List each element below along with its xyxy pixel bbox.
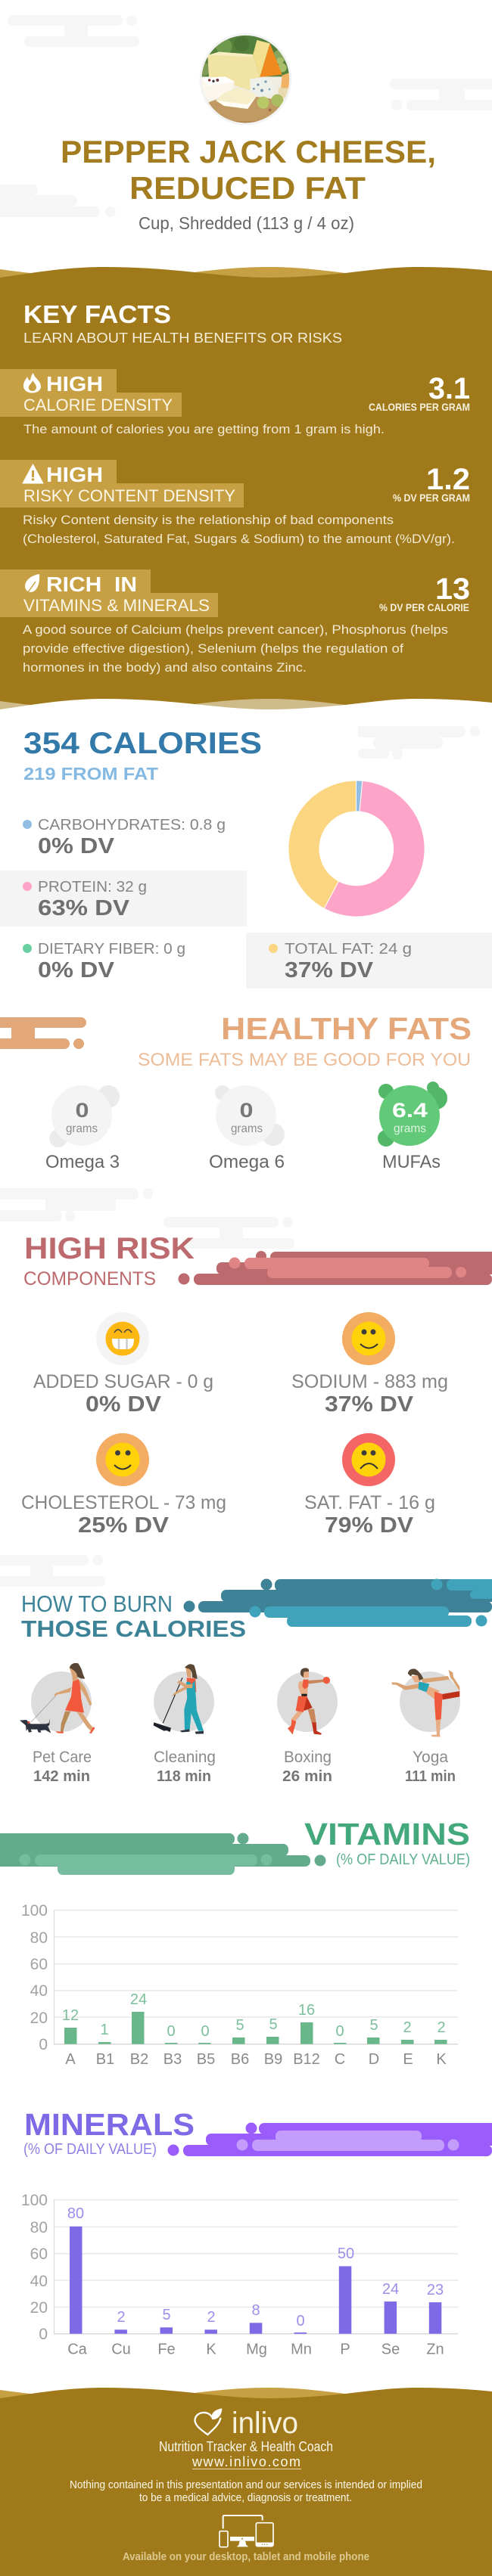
risk item: sodium [291,1312,448,1417]
bar chart: vitamins: 5 [269,2016,278,2033]
heading: minerals: (% OF DAILY VALUE) [23,2141,157,2158]
bar chart: vitamins: 60 [30,1956,48,1973]
bar chart: minerals: Ca [67,2342,88,2358]
heading: calories: 354 CALORIES [23,727,262,760]
heading: calories [23,727,262,784]
card: omega 6: grams [231,1122,263,1135]
icon: smiling face [351,1322,386,1355]
icon: woman in dancer pose [391,1668,459,1736]
bar chart: minerals: Mn [291,2342,312,2358]
bar chart: minerals: K [206,2342,216,2358]
legend: total fat [246,933,492,989]
heading: high risk: COMPONENTS [23,1268,156,1290]
bar chart: vitamins: B5 [197,2051,215,2068]
card: omega 3: grams [66,1122,98,1135]
bar chart: minerals: 40 [30,2273,48,2290]
bar chart: vitamins: 5 [235,2017,244,2034]
bar chart: minerals: 2 [207,2309,216,2326]
bar chart: minerals: 50 [338,2245,354,2262]
panel: risky content density: % DV PER GRAM [393,492,470,504]
bar chart: minerals: 24 [382,2281,399,2298]
panel: rich in vitamins and minerals: 13 [435,573,470,606]
bar chart: minerals: Zn [426,2342,444,2358]
card: mufas: MUFAs [382,1152,441,1172]
bar chart: vitamins: B2 [130,2051,148,2068]
title: PEPPER JACK CHEESE, [61,134,436,169]
bar chart: vitamins: 2 [437,2019,446,2036]
activity: boxing: 26 min [282,1768,332,1785]
panel: calorie density [0,369,470,436]
panel: calorie density: 3.1 [428,372,470,405]
logo: inlivo [195,2407,298,2440]
activity: pet care: Pet Care [33,1749,92,1766]
bar chart: vitamins: 20 [30,2010,48,2027]
logo: inlivo: inlivo [232,2407,298,2440]
heading: key facts [23,300,342,346]
bar chart: minerals: 0 [296,2313,305,2329]
risk item: saturated fat: 79% DV [325,1513,414,1538]
legend: total fat: TOTAL FAT: 24 g [285,941,412,957]
disclaimer: Nothing contained in this presentation and our services is intended or implied [70,2478,422,2491]
risk item: saturated fat: SAT. FAT - 16 g [304,1492,435,1513]
heading: how to burn those calories [21,1591,246,1642]
bar chart: vitamins: E [403,2051,413,2068]
icon: woman walking dog [20,1663,95,1733]
heading: high risk: HIGH RISK [24,1232,195,1265]
bar chart: vitamins: 0 [39,2036,48,2053]
activity: yoga [391,1668,460,1785]
bar chart: vitamins: B6 [231,2051,249,2068]
activity: boxing: Boxing [284,1749,332,1766]
activity: boxing [277,1668,338,1785]
bar chart: minerals: P [340,2342,350,2358]
bar chart: minerals: 23 [427,2282,444,2298]
tagline: Nutrition Tracker & Health Coach [159,2439,333,2454]
panel: calorie density: CALORIE DENSITY [23,396,173,414]
heading: minerals: MINERALS [24,2107,195,2142]
risk item: cholesterol: CHOLESTEROL - 73 mg [21,1492,226,1513]
icon: leaf [25,574,39,592]
icon: grinning face [106,1322,139,1355]
bar chart: vitamins: K [436,2051,447,2068]
availability note: Available on your desktop, tablet and mobile phone [123,2550,369,2563]
activity: yoga: Yoga [413,1749,448,1766]
title: REDUCED FAT [129,170,366,206]
icon: woman sweeping [154,1664,204,1734]
legend: protein: PROTEIN: 32 g [38,879,147,895]
bar chart: minerals: 20 [30,2299,48,2317]
panel: footer background with waves [0,2388,492,2576]
panel: calorie density: HIGH [46,372,103,396]
bar chart: vitamins: B9 [264,2051,282,2068]
bar chart: vitamins: 1 [100,2022,109,2038]
panel: rich in vitamins and minerals: hormones in the body) and also contains Zinc. [23,660,307,675]
bar chart: vitamins: 24 [130,1991,147,2008]
panel: key facts background with waves [0,267,492,722]
icon: flame [23,373,41,393]
bar chart: vitamins: 100 [21,1902,48,1920]
bar chart: vitamins: 0 [335,2023,344,2040]
bar chart: minerals: 2 [117,2309,126,2326]
bar chart: minerals: 100 [21,2192,48,2209]
bar chart: minerals: 8 [251,2302,260,2319]
bar chart: vitamins: B3 [163,2051,182,2068]
icon: heart with leaf [195,2408,222,2435]
decorative blob: burn calories [183,1579,492,1627]
heading: healthy fats: HEALTHY FATS [221,1011,472,1046]
heading: how to burn those calories: THOSE CALORIES [21,1615,246,1642]
legend: dietary fiber: 0% DV [38,958,115,982]
bar chart: vitamins: 0 [201,2023,210,2040]
bar chart: vitamins: 2 [403,2019,412,2036]
bar chart: minerals: Mg [246,2342,267,2358]
risk item: added sugar: 0% DV [86,1392,162,1417]
risk item: sodium: SODIUM - 883 mg [291,1371,448,1392]
bar chart: vitamins: D [369,2051,379,2068]
decorative blob: vitamins [0,1833,325,1875]
decorative blob: healthy fats [0,1017,86,1049]
bar chart: vitamins: B12 [293,2051,320,2068]
icon: devices [220,2515,273,2547]
heading: calories: 219 FROM FAT [23,764,158,784]
bar chart: vitamins: 16 [298,2002,315,2019]
bar chart: vitamins: 0 [167,2023,176,2040]
risk item: cholesterol: 25% DV [78,1513,170,1538]
risk item: saturated fat [304,1433,435,1538]
panel: calorie density: The amount of calories you are getting from 1 gram is high. [23,422,385,436]
bar chart: minerals: 5 [162,2307,171,2323]
activity: cleaning [154,1664,216,1785]
bar chart: minerals: 80 [67,2205,84,2222]
website link: www.inlivo.com [192,2454,300,2469]
bar chart: vitamins: C [335,2051,345,2068]
bar chart: vitamins [21,1902,458,2068]
panel: risky content density [0,460,470,546]
panel: risky content density: RISKY CONTENT DENSITY [23,486,235,505]
card: omega 3: Omega 3 [45,1152,120,1172]
bar chart: vitamins: 40 [30,1982,48,2000]
risk item: sodium: 37% DV [325,1392,414,1417]
bar chart: minerals: 0 [39,2326,48,2343]
icon: smiling face [106,1443,139,1476]
bar chart: vitamins: 5 [369,2017,378,2034]
legend: protein: 63% DV [38,896,130,920]
disclaimer [70,2478,422,2504]
risk item: cholesterol [21,1433,226,1538]
bar chart: minerals: Se [381,2342,400,2358]
activity: cleaning: 118 min [157,1768,211,1785]
bar chart: vitamins: B1 [96,2051,114,2068]
heading: healthy fats: SOME FATS MAY BE GOOD FOR YOU [138,1050,471,1070]
bar chart: minerals: Cu [111,2342,131,2358]
panel: risky content density: (Cholesterol, Saturated Fat, Sugars & Sodium) to the amount (%DV/gr). [23,532,455,546]
decorative blob: minerals [168,2122,492,2156]
decorative clouds: header [0,15,492,217]
legend: protein [0,871,247,926]
card: omega 6: Omega 6 [209,1152,285,1172]
panel: risky content density: Risky Content density is the relationship of bad components [23,513,394,527]
heading: high risk [23,1232,195,1290]
title [61,134,436,206]
bar chart: minerals: 80 [30,2219,48,2236]
serving size: Cup, Shredded (113 g / 4 oz) [139,213,354,233]
legend: carbohydrates: 0% DV [38,834,115,858]
risk item: added sugar [33,1312,213,1417]
heading: vitamins: (% OF DAILY VALUE) [336,1851,470,1868]
card: omega 3 [45,1085,120,1172]
card: mufas: 6.4 [392,1099,428,1122]
panel: rich in vitamins and minerals: RICH IN [46,573,137,596]
heading: minerals [23,2107,195,2158]
card: omega 3: 0 [76,1099,89,1122]
disclaimer: to be a medical advice, diagnosis or treatment. [139,2491,352,2504]
panel: rich in vitamins and minerals: VITAMINS & MINERALS [23,596,210,615]
panel: rich in vitamins and minerals: % DV PER CALORIE [379,601,469,613]
panel: risky content density: HIGH [46,463,103,486]
legend: carbohydrates [23,817,226,858]
panel: rich in vitamins and minerals: A good source of Calcium (helps prevent cancer), Phosphorus (helps [23,622,448,637]
heading: how to burn those calories: HOW TO BURN [21,1591,173,1617]
card: omega 6: 0 [239,1099,253,1122]
panel: rich in vitamins and minerals: provide effective digestion), Selenium (helps the regulation of [23,641,403,656]
decorative cloud: burn calories [0,1555,105,1587]
icon: boxer [288,1668,330,1735]
card: omega 6 [209,1085,285,1172]
decorative blob: high risk [179,1251,492,1285]
bar chart: vitamins: 80 [30,1929,48,1947]
activity: yoga: 111 min [405,1768,456,1785]
heading: healthy fats [138,1011,472,1070]
panel: calorie density: CALORIES PER GRAM [369,401,470,413]
bar chart: minerals: 60 [30,2245,48,2263]
donut chart: macronutrients [288,781,425,917]
bar chart: minerals: Fe [157,2342,176,2358]
legend: carbohydrates: CARBOHYDRATES: 0.8 g [38,817,226,833]
legend: total fat: 37% DV [285,958,374,982]
card: mufas: grams [394,1122,426,1135]
bar chart: vitamins: 12 [62,2007,79,2024]
heading: vitamins: VITAMINS [304,1817,470,1851]
icon: warning triangle [23,464,43,483]
heading: key facts: LEARN ABOUT HEALTH BENEFITS OR RISKS [23,330,342,346]
icon: frowning face [351,1443,386,1476]
card: mufas [378,1082,447,1172]
heading: key facts: KEY FACTS [23,300,171,328]
decorative cloud: calories [358,726,480,759]
risk item: added sugar: ADDED SUGAR - 0 g [33,1371,213,1392]
decorative clouds: high risk [0,1188,294,1249]
panel: rich in vitamins and minerals [0,570,470,675]
bar chart: minerals [21,2192,458,2358]
activity: pet care [20,1663,95,1785]
activity: cleaning: Cleaning [154,1749,216,1766]
bar chart: vitamins: A [65,2051,76,2068]
legend: dietary fiber: DIETARY FIBER: 0 g [38,941,185,957]
panel: risky content density: 1.2 [426,463,470,496]
legend: dietary fiber [23,941,185,982]
activity: pet care: 142 min [33,1768,90,1785]
heading: vitamins [304,1817,470,1868]
image: cheese platter photo [200,33,291,126]
